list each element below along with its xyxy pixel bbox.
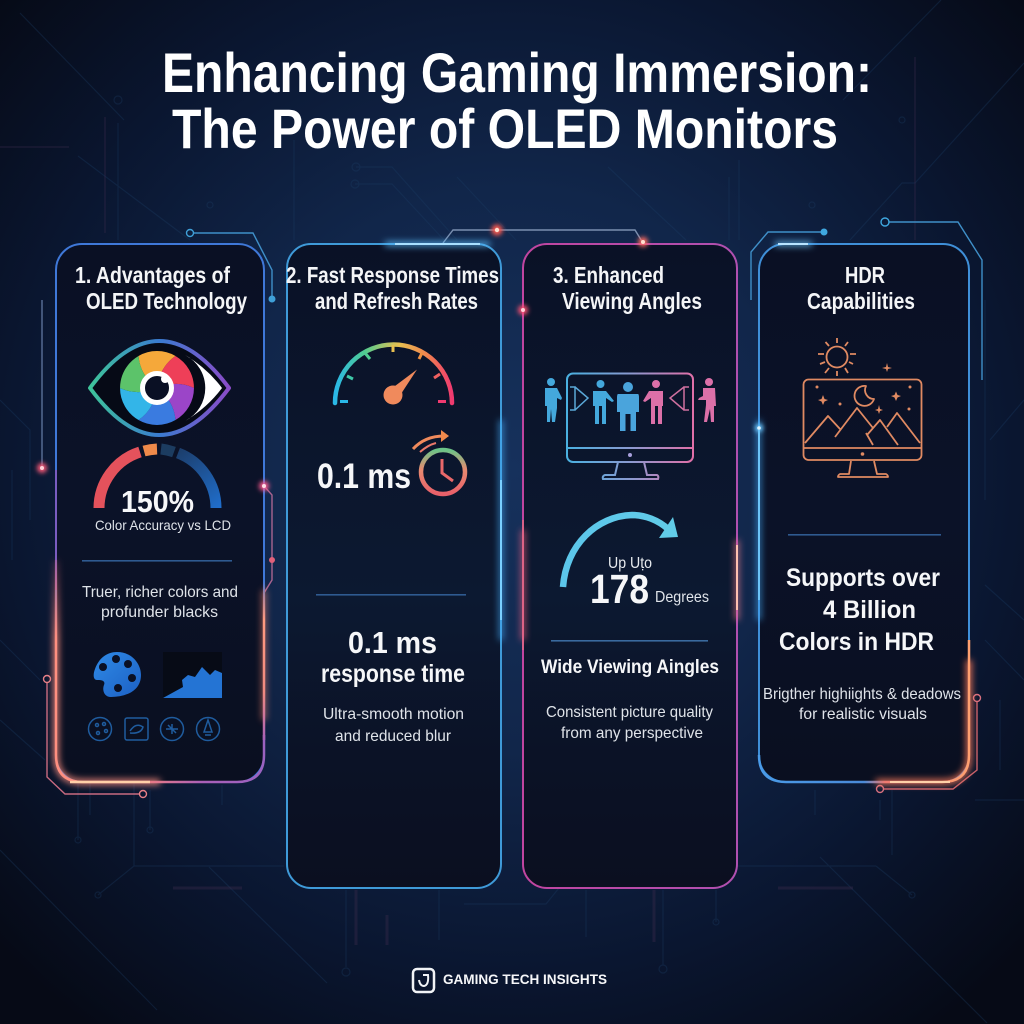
- title: The Power of OLED Monitors: [172, 97, 838, 160]
- title: Enhancing Gaming Immersion:: [162, 41, 872, 104]
- panel 1: advantages of OLED technology: [56, 244, 264, 782]
- panel 2 description: [323, 706, 464, 745]
- panel 2 description: Ultra-smooth motion: [323, 706, 464, 723]
- panel 3 description: from any perspective: [561, 725, 703, 742]
- stat: up to 178 degrees: 178: [590, 566, 649, 612]
- gauge: 150 percent color accuracy: [99, 449, 216, 508]
- panel 2 description: and reduced blur: [335, 728, 452, 745]
- panel 1 description: Truer, richer colors and: [82, 584, 238, 601]
- stat: 0.1 ms with clock: [317, 430, 465, 496]
- stars: [816, 363, 912, 414]
- response time statement: response time: [321, 660, 465, 688]
- footer brand: [413, 969, 607, 992]
- panel 1 heading: 1. Advantages of: [75, 262, 230, 288]
- icon: rainbow eye: [90, 341, 229, 435]
- panel 1 heading: OLED Technology: [86, 288, 247, 314]
- panel 4 description: [763, 686, 961, 723]
- panel 2 heading: [286, 262, 499, 314]
- panel 2 heading: 2. Fast Response Times: [286, 262, 499, 288]
- panel 3: enhanced viewing angles: [523, 244, 737, 888]
- stat: up to 178 degrees: Up Uṭo: [608, 555, 652, 572]
- glowing circuit nodes: [37, 224, 763, 563]
- panel 3 heading: [553, 262, 702, 314]
- icon: deep black landscape: [163, 652, 222, 698]
- panel 4: HDR capabilities: [759, 244, 969, 782]
- panel 1 description: [82, 584, 238, 621]
- stat: over 4 billion colors: [779, 564, 940, 656]
- panel 4 heading: Capabilities: [807, 288, 915, 314]
- panel 4 description: Brigther highiights & deadows: [763, 686, 961, 703]
- small feature icons: [88, 718, 220, 740]
- stat: 150 percent: Color Accuracy vs LCD: [95, 517, 231, 533]
- stat: up to 178 degrees: [590, 555, 709, 612]
- arrow: viewing angle arc: [563, 515, 678, 587]
- panel 4 heading: [807, 262, 915, 314]
- icon: speedometer: [335, 345, 452, 404]
- panel 3 subheading: Wide Viewing Aingles: [541, 657, 719, 678]
- stat: 150 percent: 150%: [121, 484, 194, 519]
- stat: over 4 billion colors: Supports over: [786, 564, 940, 592]
- moon: [854, 386, 874, 406]
- icon: brand logo: [413, 969, 434, 992]
- panel 3 heading: Viewing Angles: [562, 288, 702, 314]
- panel 4 heading: HDR: [845, 262, 885, 288]
- panel 2 heading: and Refresh Rates: [315, 288, 478, 314]
- icon: HDR monitor with sun, moon and mountains: [804, 338, 922, 477]
- stat: over 4 billion colors: 4 Billion: [823, 596, 916, 624]
- panel 3 description: Consistent picture quality: [546, 704, 713, 721]
- sun: [818, 338, 856, 376]
- panel 4 description: for realistic visuals: [799, 706, 927, 723]
- icon: monitor with viewers: [545, 374, 716, 479]
- response time statement: 0.1 ms: [348, 625, 437, 660]
- panel 1 heading: [75, 262, 247, 314]
- viewers: [545, 378, 716, 431]
- title: [162, 41, 872, 160]
- panel 3 description: [546, 704, 713, 742]
- stat: 150 percent: [95, 484, 231, 533]
- panel 3 heading: 3. Enhanced: [553, 262, 664, 288]
- icon: palette: [94, 652, 141, 697]
- panel 1 description: profunder blacks: [101, 604, 218, 621]
- panel 2: fast response times and refresh rates: [286, 244, 501, 888]
- stat: 0.1 ms with clock: 0.1 ms: [317, 457, 411, 496]
- circuit traces around the panels: [42, 218, 982, 798]
- footer brand: GAMING TECH INSIGHTS: [443, 971, 607, 987]
- mountains: [805, 408, 920, 445]
- viewing angle markers: [570, 387, 689, 410]
- stat: over 4 billion colors: Colors in HDR: [779, 628, 934, 656]
- response time statement: [321, 625, 465, 688]
- stat: up to 178 degrees: Degrees: [655, 589, 709, 606]
